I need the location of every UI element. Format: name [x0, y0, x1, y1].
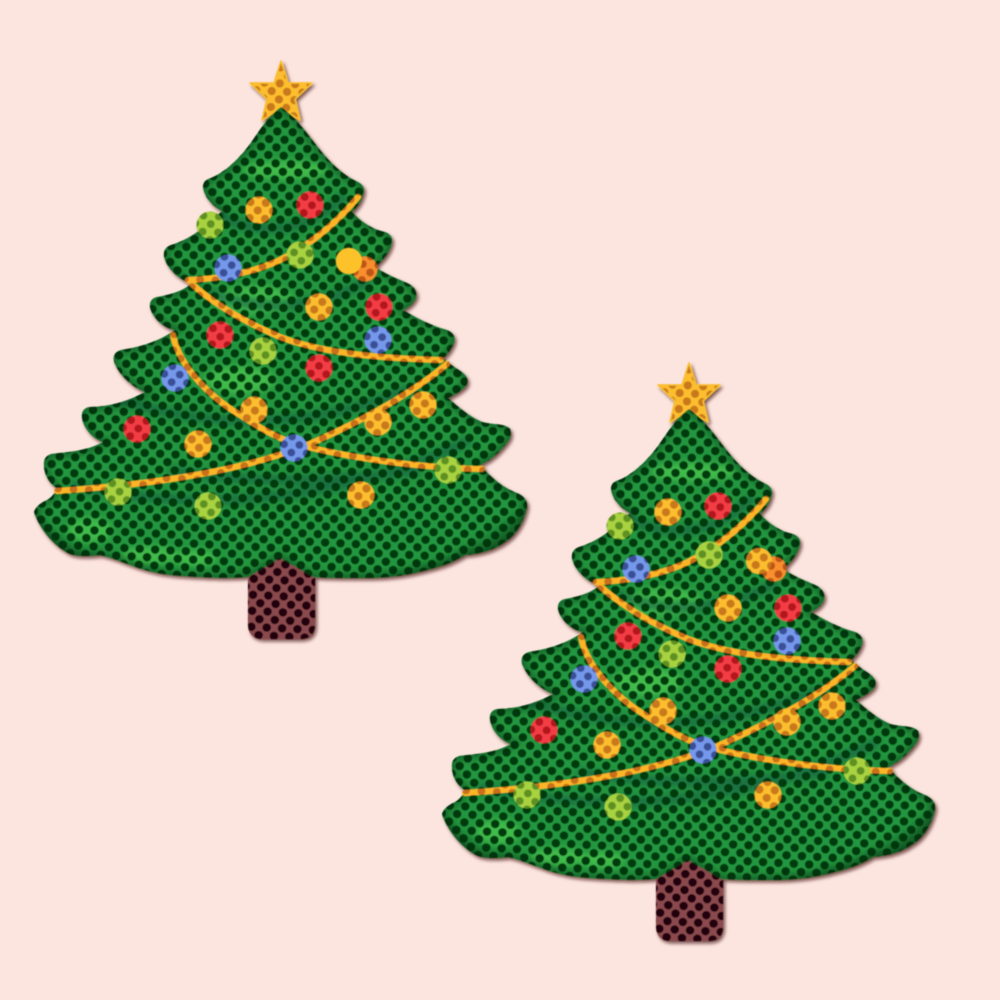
ornaments: left tree: [104, 192, 462, 520]
ornaments: right tree: [514, 492, 870, 820]
tree: lower right: [438, 363, 938, 941]
tree: upper left: [30, 61, 530, 639]
